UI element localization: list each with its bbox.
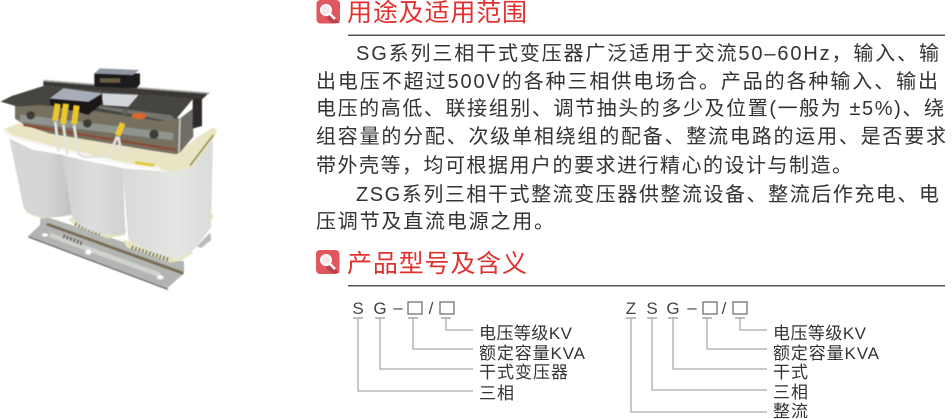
diagram: SG model code: G bbox=[373, 299, 387, 318]
icon: magnifier bbox=[316, 0, 340, 24]
body text: product description bbox=[316, 42, 946, 233]
diagram: ZSG model code: S bbox=[646, 299, 658, 318]
product photo: three-phase dry-type transformer bbox=[1, 68, 217, 290]
body text: product description: SG系列三相干式变压器广泛适用于交流50–60Hz，输入、输 bbox=[356, 42, 939, 65]
diagram: SG model code: – bbox=[393, 298, 403, 317]
diagram: SG model code: 干式变压器 bbox=[479, 363, 568, 382]
diagram: ZSG model code: 电压等级KV bbox=[773, 324, 867, 343]
diagram: SG model code: S bbox=[352, 299, 364, 318]
diagram: SG model code bbox=[352, 298, 586, 403]
body text: product description: 组容量的分配、次级单相绕组的配备、整流电路的运用、是否要求 bbox=[316, 125, 946, 148]
icon: magnifier bbox=[316, 250, 340, 274]
diagram: SG model code: 电压等级KV bbox=[479, 324, 573, 343]
diagram: ZSG model code: 三相 bbox=[773, 383, 808, 402]
heading: model meaning: 产品型号及含义 bbox=[347, 250, 527, 278]
diagram: ZSG model code: Z bbox=[626, 299, 636, 318]
diagram: ZSG model code: G bbox=[666, 299, 680, 318]
diagram: ZSG model code: – bbox=[687, 298, 697, 317]
diagram: SG model code: 额定容量KVA bbox=[479, 344, 586, 363]
body text: product description: 出电压不超过500V的各种三相供电场合。产品的各种输入、输出 bbox=[316, 70, 938, 93]
diagram: SG model code: / bbox=[429, 299, 434, 318]
body text: product description: 压调节及直流电源之用。 bbox=[316, 210, 554, 233]
diagram: ZSG model code bbox=[626, 298, 880, 419]
diagram: ZSG model code: 额定容量KVA bbox=[773, 344, 880, 363]
body text: product description: 带外壳等，均可根据用户的要求进行精心的设计与制造。 bbox=[316, 154, 852, 177]
diagram: ZSG model code: 干式 bbox=[773, 363, 808, 382]
diagram: ZSG model code: / bbox=[722, 299, 727, 318]
body text: product description: 电压的高低、联接组别、调节抽头的多少及位置(一般为 ±5%)、绕 bbox=[316, 97, 944, 120]
body text: product description: ZSG系列三相干式整流变压器供整流设备、整流后作充电、电 bbox=[356, 183, 939, 206]
diagram: SG model code: 三相 bbox=[479, 384, 514, 403]
